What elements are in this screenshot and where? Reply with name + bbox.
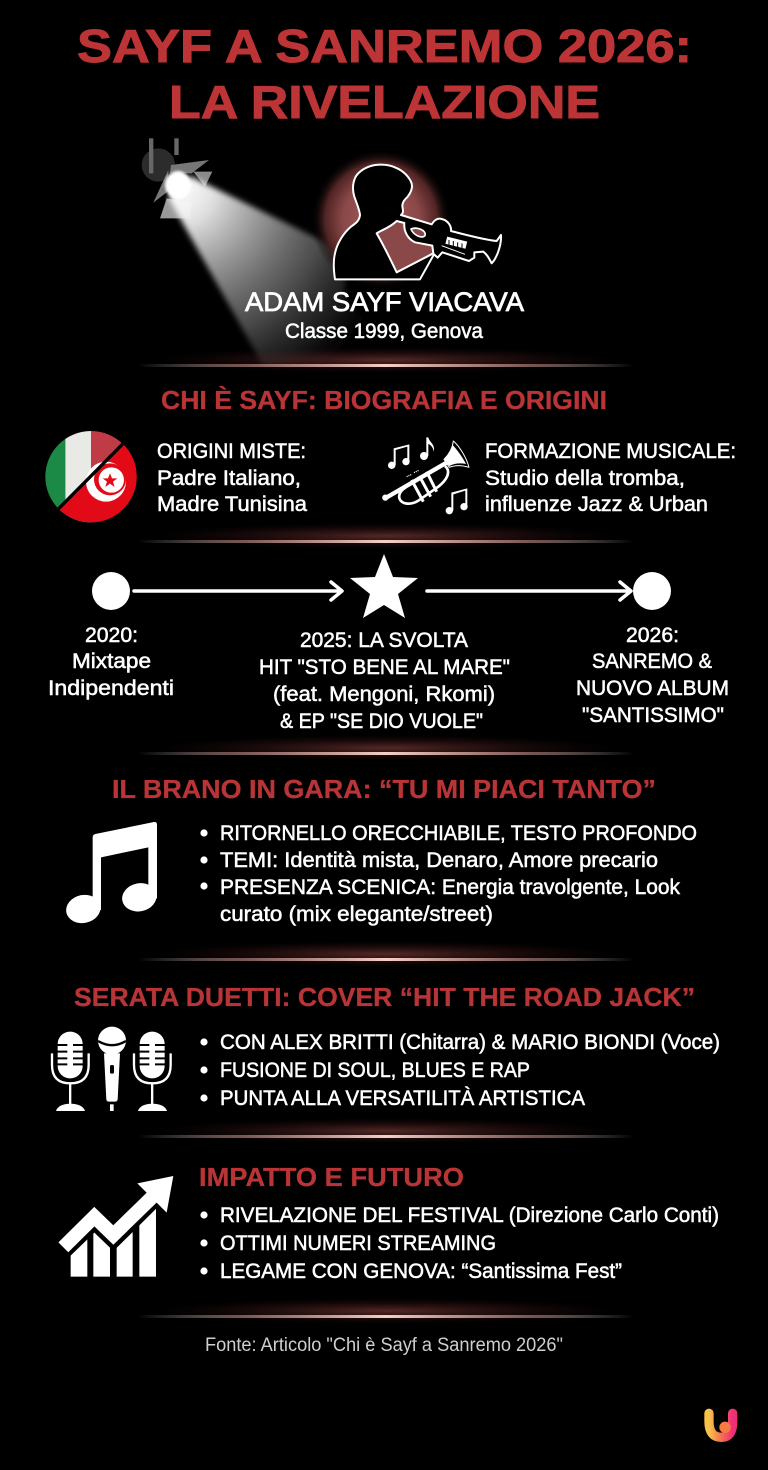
text: formazione musicale: Studio della tromba, bbox=[485, 466, 685, 490]
text: 2025: & EP "SE DIO VUOLE" bbox=[280, 709, 483, 733]
text: origini miste: Padre Italiano, bbox=[157, 466, 301, 490]
text: 2026: "SANTISSIMO" bbox=[582, 703, 724, 727]
arrow 2025 to 2026 bbox=[427, 582, 631, 600]
title bbox=[77, 20, 692, 128]
bullet list: duetti: FUSIONE DI SOUL, BLUES E RAP bbox=[220, 1058, 530, 1082]
bullet list: impatto: LEGAME CON GENOVA: “Santissima Fest” bbox=[220, 1259, 622, 1283]
heading: biografia: CHI È SAYF: BIOGRAFIA E ORIGINI bbox=[161, 385, 607, 415]
text: 2026 bbox=[576, 623, 729, 727]
divider 1 bbox=[138, 347, 634, 373]
text: 2025 bbox=[259, 628, 510, 733]
title: SAYF A SANREMO 2026: bbox=[77, 20, 692, 72]
text: origini miste: ORIGINI MISTE: bbox=[157, 439, 306, 463]
text: origini miste: Madre Tunisina bbox=[157, 492, 307, 516]
artist name: ADAM SAYF VIACAVA bbox=[245, 287, 524, 317]
arrow 2020 to 2025 bbox=[134, 582, 342, 600]
artist name bbox=[245, 287, 524, 343]
bullet list: impatto bbox=[200, 1203, 719, 1283]
text: 2025: (feat. Mengoni, Rkomi) bbox=[273, 682, 495, 706]
icon: trumpet and music notes bbox=[382, 437, 469, 514]
bullet list: duetti bbox=[200, 1030, 720, 1110]
divider 4 bbox=[138, 941, 634, 967]
divider 2 bbox=[138, 523, 634, 549]
text: 2020: Indipendenti bbox=[48, 676, 174, 700]
bullet list: duetti: CON ALEX BRITTI (Chitarra) & MARIO BIONDI (Voce) bbox=[220, 1030, 720, 1054]
bullet list: duetti: PUNTA ALLA VERSATILITÀ ARTISTICA bbox=[220, 1085, 586, 1110]
timeline marker 2020 bbox=[92, 572, 130, 610]
text: 2020 bbox=[48, 623, 174, 700]
bullet list: brano: RITORNELLO ORECCHIABILE, TESTO PROFONDO bbox=[220, 821, 697, 845]
title: LA RIVELAZIONE bbox=[169, 76, 600, 128]
icon: rising chart with arrow bbox=[60, 1176, 173, 1277]
text: formazione musicale bbox=[485, 439, 736, 516]
bullet list: impatto: RIVELAZIONE DEL FESTIVAL (Direzione Carlo Conti) bbox=[220, 1203, 719, 1227]
divider 6 bbox=[138, 1298, 634, 1324]
timeline star 2025 bbox=[350, 554, 418, 618]
text: 2026: 2026: bbox=[626, 623, 679, 647]
heading: serata duetti: SERATA DUETTI: COVER “HIT THE ROAD JACK” bbox=[74, 982, 695, 1012]
bullet list: impatto: OTTIMI NUMERI STREAMING bbox=[220, 1231, 496, 1255]
text: 2026: SANREMO & bbox=[592, 649, 712, 673]
icon: Italian and Tunisian flag circle bbox=[43, 430, 140, 527]
text: origini miste bbox=[157, 439, 307, 516]
divider 3 bbox=[138, 735, 634, 761]
logo bbox=[709, 1413, 733, 1437]
timeline marker 2026 bbox=[633, 572, 671, 610]
divider 5 bbox=[138, 1118, 634, 1144]
bullet list: brano bbox=[200, 821, 697, 926]
source note: Fonte: Articolo "Chi è Sayf a Sanremo 2026" bbox=[205, 1335, 563, 1356]
icon: spotlight with light beam bbox=[142, 138, 410, 365]
icon: music note bbox=[63, 822, 159, 926]
heading: impatto e futuro: IMPATTO E FUTURO bbox=[199, 1162, 464, 1192]
text: 2020: 2020: bbox=[85, 623, 138, 647]
text: 2025: HIT "STO BENE AL MARE" bbox=[259, 655, 510, 679]
icon: three microphones bbox=[52, 1027, 171, 1111]
bullet list: brano: PRESENZA SCENICA: Energia travolgente, Look bbox=[220, 875, 680, 899]
timeline bbox=[48, 554, 729, 733]
text: formazione musicale: FORMAZIONE MUSICALE: bbox=[485, 439, 736, 463]
bullet list: brano: TEMI: Identità mista, Denaro, Amore precario bbox=[220, 848, 658, 872]
text: 2026: NUOVO ALBUM bbox=[576, 676, 729, 700]
text: formazione musicale: influenze Jazz & Urban bbox=[485, 492, 708, 516]
text: 2020: Mixtape bbox=[72, 649, 151, 673]
artist name: Classe 1999, Genova bbox=[285, 319, 483, 343]
illustration: trumpet player silhouette bbox=[311, 149, 501, 289]
bullet list: brano: curato (mix elegante/street) bbox=[220, 902, 493, 926]
heading: il brano in gara: IL BRANO IN GARA: “TU MI PIACI TANTO” bbox=[112, 774, 656, 804]
text: 2025: 2025: LA SVOLTA bbox=[300, 628, 469, 652]
